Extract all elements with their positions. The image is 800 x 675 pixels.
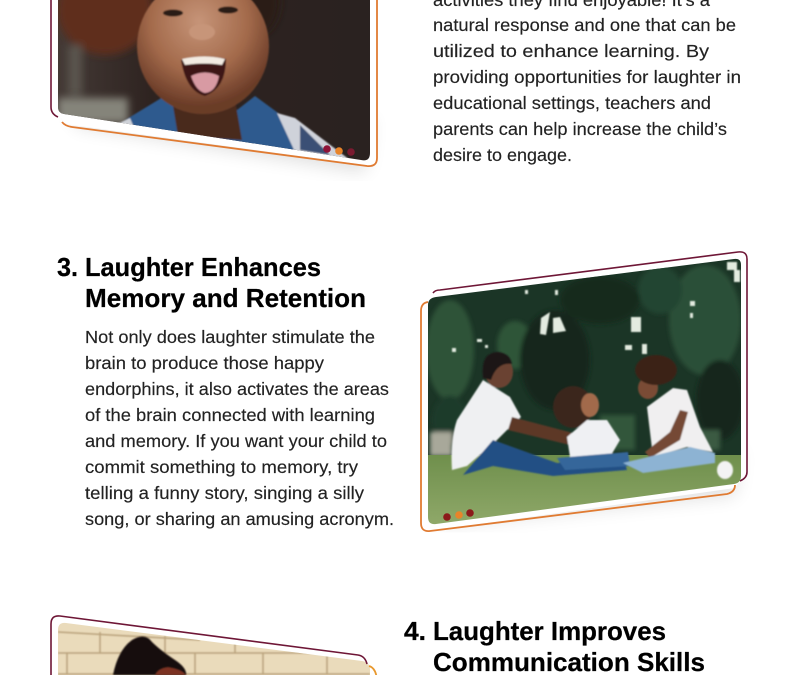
- text block: point 3 paragraph: and memory. If you want your child to: [85, 431, 387, 451]
- text block: point 2 closing paragraph: desire to engage.: [433, 145, 572, 165]
- photo: laughing child: [57, 0, 370, 170]
- text block: point 2 closing paragraph: providing opportunities for laughter in: [433, 67, 741, 87]
- heading: point 3: 3.: [57, 252, 78, 282]
- panel: photo of laughing child: [51, 0, 377, 172]
- text block: point 2 closing paragraph: educational settings, teachers and: [433, 93, 711, 113]
- panel: photo of child by brick wall: [51, 616, 377, 675]
- text block: point 3 paragraph: [85, 327, 394, 529]
- text block: point 3 paragraph: telling a funny story, singing a silly: [85, 483, 364, 503]
- shirt: [126, 96, 295, 150]
- photo: family on grass: [426, 255, 744, 527]
- text block: point 2 closing paragraph: utilized to enhance learning. By: [433, 41, 709, 61]
- crimson frame: [51, 0, 58, 117]
- text block: point 3 paragraph: of the brain connected with learning: [85, 405, 375, 425]
- text block: point 3 paragraph: song, or sharing an amusing acronym.: [85, 509, 394, 529]
- woman: [647, 388, 713, 457]
- photo: brick wall and child's hair: [58, 620, 370, 675]
- decorative dots: [323, 145, 355, 156]
- crimson frame: [433, 252, 747, 481]
- heading: point 4: [404, 616, 705, 675]
- panel: photo of family sitting on grass: [421, 252, 747, 531]
- orange frame: [421, 302, 735, 531]
- text block: point 2 closing paragraph: natural response and one that can be: [433, 15, 736, 35]
- heading: point 4: 4.: [404, 616, 426, 646]
- man: [452, 380, 521, 470]
- crimson frame: [51, 616, 367, 675]
- text block: point 3 paragraph: commit something to memory, try: [85, 457, 358, 477]
- text block: point 2 closing paragraph: parents can help increase the child’s: [433, 119, 727, 139]
- text block: point 3 paragraph: endorphins, it also activates the areas: [85, 379, 389, 399]
- text block: point 2 closing paragraph: [433, 0, 741, 165]
- child: [553, 386, 593, 428]
- decorative dots: [443, 509, 474, 521]
- heading: point 3: [57, 252, 366, 313]
- orange frame: [369, 666, 377, 675]
- text block: point 3 paragraph: Not only does laughter stimulate the: [85, 327, 375, 347]
- heading: point 3: Laughter Enhances: [85, 252, 321, 282]
- heading: point 4: Laughter Improves: [433, 616, 666, 646]
- heading: point 3: Memory and Retention: [85, 283, 366, 313]
- text block: point 3 paragraph: brain to produce those happy: [85, 353, 324, 373]
- orange frame: [62, 0, 377, 166]
